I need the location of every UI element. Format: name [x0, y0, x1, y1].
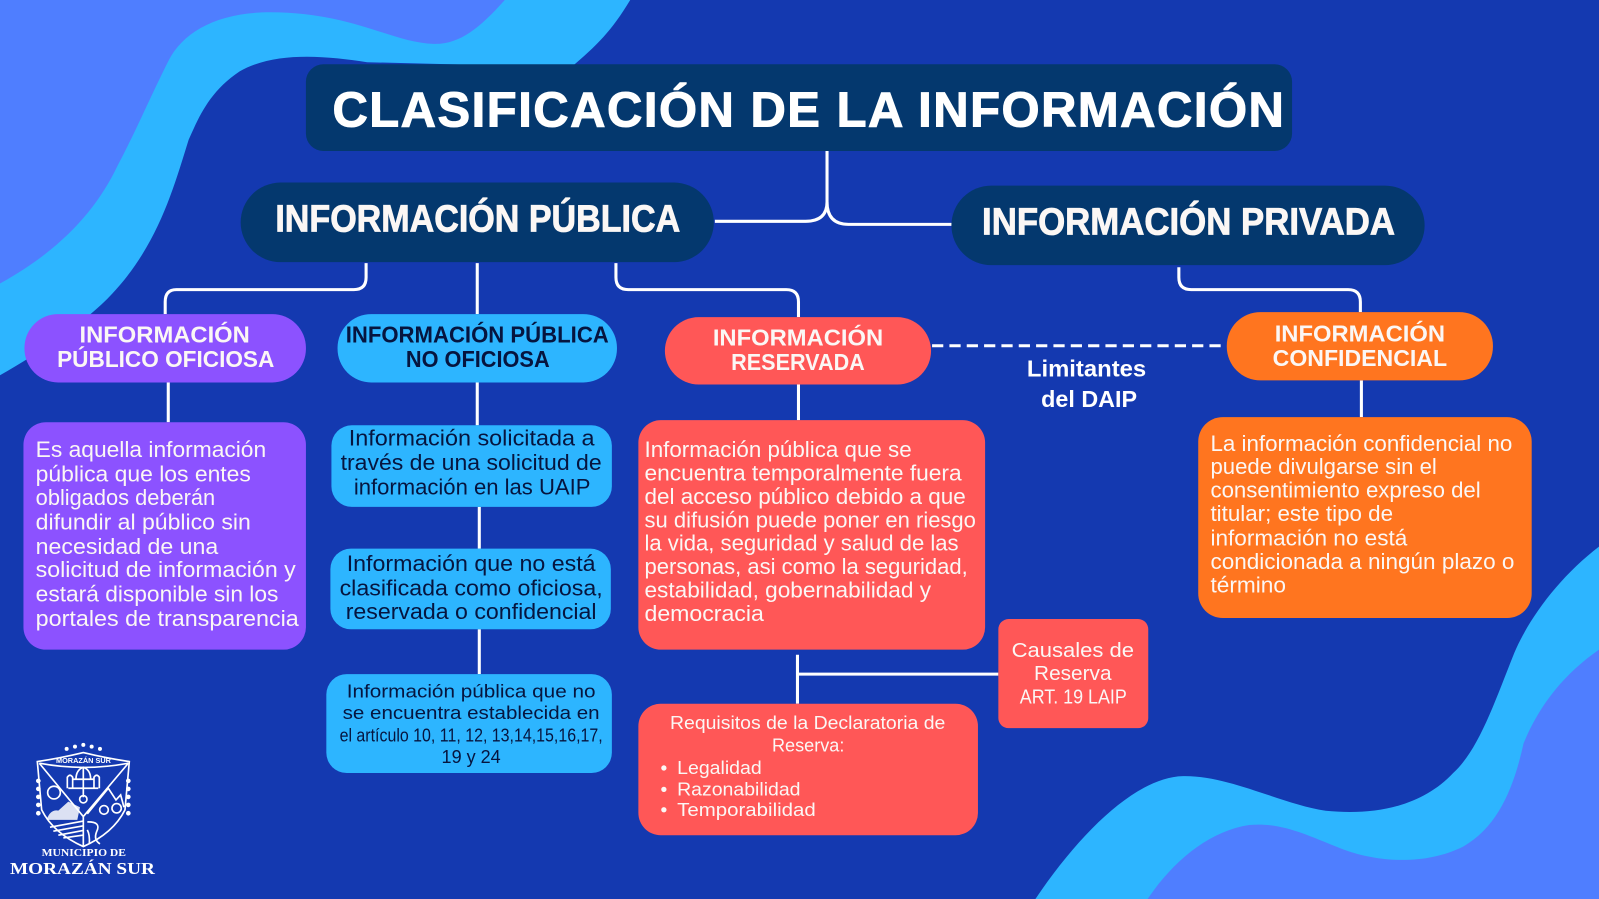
- title: CLASIFICACIÓN DE LA INFORMACIÓN: [332, 82, 1284, 137]
- panel: público oficiosa description: Es aquella información: [36, 437, 266, 462]
- panel: requisitos de la declaratoria: Reserva:: [772, 735, 844, 756]
- wave: bottom right: [1035, 547, 1599, 899]
- panel: no oficiosa item 2: [330, 549, 611, 629]
- panel: requisitos de la declaratoria: Requisitos de la Declaratoria de: [670, 712, 945, 733]
- panel: no oficiosa item 2: Información que no está: [347, 551, 596, 576]
- panel: reservada description: del acceso público debido a que: [644, 484, 966, 509]
- panel: causales de reserva: Reserva: [1034, 663, 1113, 685]
- panel: reservada description: democracia: [644, 601, 765, 626]
- panel: no oficiosa item 3: [326, 674, 612, 773]
- panel: confidencial description: término: [1210, 573, 1286, 598]
- panel: confidencial description: puede divulgarse sin el: [1210, 454, 1437, 479]
- panel: requisitos de la declaratoria: [638, 704, 978, 835]
- panel: público oficiosa description: necesidad de una: [36, 534, 219, 559]
- panel: público oficiosa description: estará disponible sin los: [36, 582, 278, 607]
- panel: confidencial description: [1198, 417, 1532, 618]
- pill: información pública no oficiosa: [338, 314, 617, 382]
- panel: reservada description: personas, asi como la seguridad,: [644, 554, 968, 579]
- panel: no oficiosa item 3: Información pública que no: [347, 681, 596, 702]
- label: limitantes del DAIP: [1027, 355, 1146, 412]
- heading: información pública: INFORMACIÓN PÚBLICA: [275, 198, 680, 240]
- pill: información reservada: INFORMACIÓN: [713, 324, 883, 351]
- panel: público oficiosa description: solicitud de información y: [36, 557, 296, 582]
- panel: causales de reserva: Causales de: [1012, 640, 1134, 662]
- panel: no oficiosa item 3: 19 y 24: [442, 746, 501, 767]
- panel: confidencial description: La información confidencial no: [1210, 431, 1512, 456]
- logo: Municipio de Morazán Sur: [10, 743, 155, 878]
- pill: información público oficiosa: [24, 314, 306, 382]
- panel: requisitos de la declaratoria: Temporabilidad: [677, 799, 816, 820]
- pill: información pública no oficiosa: INFORMACIÓN PÚBLICA: [346, 321, 609, 348]
- pill: información público oficiosa: INFORMACIÓN: [80, 321, 250, 348]
- panel: no oficiosa item 1: información en las UAIP: [354, 475, 590, 500]
- pill: información confidencial: [1227, 312, 1493, 380]
- pill: información confidencial: INFORMACIÓN: [1275, 320, 1445, 347]
- title: [306, 64, 1292, 151]
- heading: información pública: [241, 183, 714, 262]
- panel: causales de reserva: ART. 19 LAIP: [1020, 687, 1127, 709]
- pill: información público oficiosa: PÚBLICO OFICIOSA: [57, 345, 274, 372]
- panel: no oficiosa item 2: reservada o confidencial: [346, 599, 597, 624]
- panel: reservada description: su difusión puede poner en riesgo: [644, 507, 976, 532]
- panel: no oficiosa item 2: clasificada como oficiosa,: [340, 576, 603, 601]
- panel: reservada description: la vida, seguridad y salud de las: [644, 531, 959, 556]
- panel: reservada description: estabilidad, gobernabilidad y: [644, 578, 931, 603]
- panel: público oficiosa description: difundir al público sin: [36, 509, 251, 534]
- pill: información pública no oficiosa: NO OFICIOSA: [406, 346, 550, 372]
- panel: no oficiosa item 1: Información solicitada a: [349, 426, 595, 451]
- panel: confidencial description: titular; este tipo de: [1210, 501, 1393, 526]
- heading: información privada: [951, 186, 1425, 265]
- panel: reservada description: encuentra temporalmente fuera: [644, 460, 962, 485]
- panel: reservada description: [638, 420, 985, 650]
- panel: público oficiosa description: obligados deberán: [36, 485, 215, 510]
- label: limitantes del DAIP: del DAIP: [1041, 386, 1137, 412]
- panel: público oficiosa description: portales de transparencia: [36, 606, 300, 631]
- label: limitantes del DAIP: Limitantes: [1027, 355, 1146, 381]
- panel: no oficiosa item 3: el artículo 10, 11, 12, 13,14,15,16,17,: [340, 724, 603, 745]
- logo: Municipio de Morazán Sur: MORAZÁN SUR: [10, 859, 155, 878]
- panel: confidencial description: consentimiento expreso del: [1210, 478, 1481, 503]
- panel: no oficiosa item 1: [331, 425, 612, 507]
- panel: reservada description: Información pública que se: [644, 437, 912, 462]
- panel: causales de reserva: [998, 619, 1148, 728]
- connectors: [165, 151, 1361, 704]
- panel: requisitos de la declaratoria: Razonabilidad: [677, 778, 801, 799]
- panel: requisitos de la declaratoria: Legalidad: [677, 757, 762, 778]
- wave: top left: [0, 0, 630, 375]
- logo: Municipio de Morazán Sur: MUNICIPIO DE: [42, 848, 126, 859]
- panel: público oficiosa description: pública que los entes: [36, 461, 251, 486]
- panel: no oficiosa item 1: través de una solicitud de: [341, 450, 602, 475]
- panel: no oficiosa item 3: se encuentra establecida en: [343, 702, 600, 723]
- pill: información confidencial: CONFIDENCIAL: [1273, 345, 1447, 371]
- panel: confidencial description: información no está: [1210, 526, 1408, 551]
- logo: Municipio de Morazán Sur: MORAZÁN SUR: [56, 756, 112, 765]
- panel: confidencial description: condicionada a ningún plazo o: [1210, 549, 1514, 574]
- pill: información reservada: [665, 317, 931, 384]
- heading: información privada: INFORMACIÓN PRIVADA: [982, 201, 1395, 243]
- panel: público oficiosa description: [23, 422, 306, 650]
- pill: información reservada: RESERVADA: [731, 349, 865, 375]
